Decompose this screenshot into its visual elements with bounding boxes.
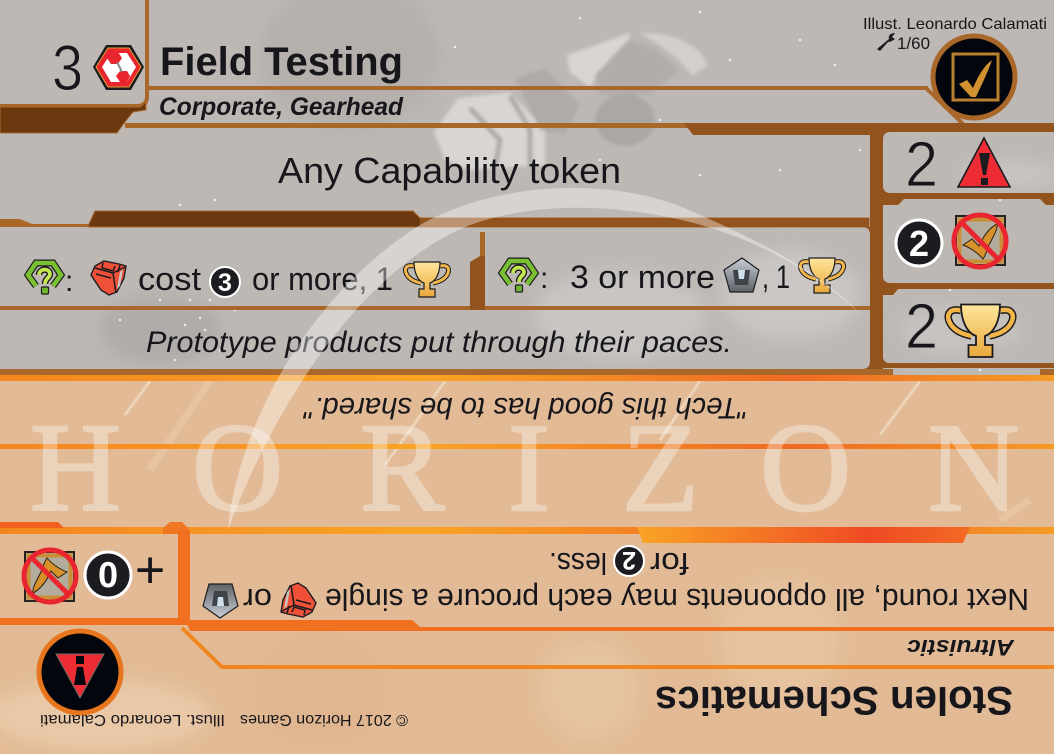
icon: corporate hex: [93, 45, 144, 90]
rule: left option: :: [65, 265, 73, 298]
rule: left option: [28, 261, 449, 298]
card number: 1/60: [897, 34, 930, 53]
requirement: any capability token: Any Capability token: [278, 150, 621, 191]
stat: zero or more no-check: +: [135, 541, 165, 599]
stat: zero or more no-check: 0: [98, 554, 118, 595]
title: Field Testing: Field Testing: [160, 40, 403, 84]
body text line two: less.: [549, 546, 607, 581]
flavor text: top card: Prototype products put through their paces.: [146, 326, 732, 359]
frame: bottom card orange lines and bands: [0, 444, 1054, 667]
icon: check badge: [933, 36, 1015, 118]
watermark: swoosh: [228, 188, 862, 530]
stat: 2 no-check: [896, 215, 1006, 267]
frame: top card brown lines and bands: [0, 0, 1054, 381]
icon: wrench: [877, 33, 895, 51]
stat: 2 warning: 2: [905, 128, 938, 200]
copyright: © 2017 Horizon Games: [240, 711, 408, 728]
rule: left option: cost: [138, 261, 201, 297]
stat: zero or more no-check: [24, 541, 165, 602]
flavor text: bottom card: "Tech this good has to be shared.": [303, 391, 748, 424]
icon: steel part: [203, 584, 238, 618]
bottom card: upside-down content: [24, 391, 1029, 728]
icon: red part: [281, 583, 316, 617]
background: top grey card half: [0, 0, 1054, 376]
stat: 2 trophy: 2: [905, 290, 938, 362]
rule: right option: 3 or more: [570, 259, 715, 295]
body text line one: Next round, all opponents may each procure a single: [325, 582, 1029, 617]
rule: right option: , 1: [762, 259, 790, 295]
credit: bottom illustrator: Illust. Leonardo Calamati: [40, 711, 225, 728]
subtitle: traits: Corporate, Gearhead: [159, 93, 404, 121]
title: Stolen Schematics: Stolen Schematics: [655, 678, 1013, 722]
icon: altruistic badge: [39, 631, 121, 713]
stat: 2 no-check: 2: [909, 223, 929, 264]
rule: right option: :: [540, 262, 548, 295]
body text line two: 2: [622, 546, 636, 574]
trait: Altruistic: Altruistic: [907, 635, 1015, 660]
rule: left option: or more, 1: [252, 261, 393, 297]
body text line two: for: [650, 546, 689, 581]
rule: right option: [502, 258, 844, 295]
body text: or: or: [243, 582, 272, 617]
background: bottom peach card half: [0, 376, 1054, 754]
stat: 2 trophy: [905, 290, 1013, 362]
background art: astronaut arm: [434, 33, 707, 170]
credit: illustrator: Illust. Leonardo Calamati: [863, 16, 1047, 33]
stat: 2 warning: [905, 128, 1010, 200]
watermark: HORIZON: HORIZON: [30, 399, 1019, 538]
top card: cost number: 3: [52, 32, 83, 104]
body text line two: [549, 546, 689, 581]
rule: left option: 3: [218, 269, 232, 297]
